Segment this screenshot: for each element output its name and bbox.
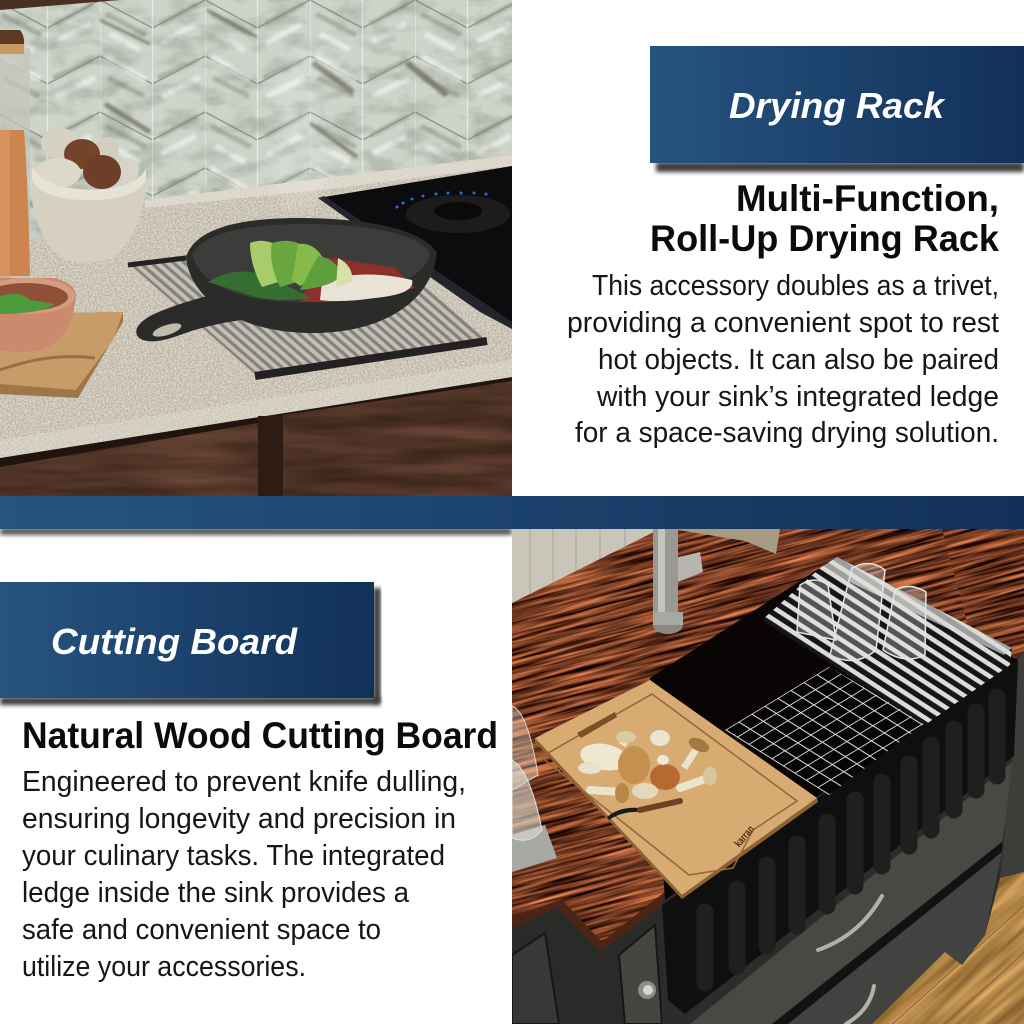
glass jar with orange contents	[0, 30, 30, 280]
body text: drying rack description	[567, 270, 999, 449]
photo: sink with cutting board and rack	[512, 529, 1024, 1024]
brand mark: karran	[732, 823, 757, 850]
body text: drying rack description: This accessory doubles as a trivet,	[592, 270, 999, 302]
roll-up drying rack	[128, 255, 488, 380]
lower left cabinet	[512, 892, 665, 1024]
heading banner: cutting board: Cutting Board	[51, 621, 298, 662]
lower drawer cabinet	[662, 652, 1024, 1024]
body text: cutting board description: Engineered to prevent knife dulling,	[22, 766, 466, 798]
body text: cutting board description: ledge inside the sink provides a	[22, 877, 410, 909]
photo: skillet on roll-up drying rack	[0, 0, 512, 496]
drinking glasses on rack	[797, 563, 926, 660]
tiled wall	[512, 529, 660, 603]
heading banner: drying rack	[650, 46, 1024, 172]
bamboo cutting board	[535, 680, 818, 899]
cooktop blue indicator lights	[396, 192, 488, 208]
body text: drying rack description: with your sink’s integrated ledge	[596, 381, 999, 413]
cabinet knob	[638, 981, 656, 999]
dark wood cabinet drawers	[0, 377, 512, 496]
upper shelf edge	[0, 0, 120, 10]
heading banner: cutting board	[0, 582, 381, 705]
hardwood floor	[872, 872, 1024, 1024]
heading banner: drying rack: Drying Rack	[729, 85, 946, 126]
subheading: natural wood cutting board: Natural Wood Cutting Board	[22, 715, 498, 756]
subheading: multi-function drying rack: Roll-Up Drying Rack	[650, 218, 999, 259]
copper bowl with greens	[0, 278, 76, 352]
sink bottom grid	[725, 667, 925, 795]
board hand grip	[577, 712, 617, 738]
sink fluted apron	[662, 660, 1018, 1014]
blue divider band	[0, 496, 1024, 535]
body text: cutting board description: utilize your accessories.	[22, 951, 306, 983]
body text: cutting board description: your culinary tasks. The integrated	[22, 840, 445, 872]
roll-up rack over sink	[762, 557, 1012, 725]
cooktop burner ring	[406, 195, 510, 233]
subheading: multi-function drying rack: Multi-Function,	[736, 178, 999, 219]
granite countertop	[0, 150, 512, 460]
induction cooktop	[318, 166, 512, 329]
paring knife	[607, 801, 680, 820]
body text: cutting board description: safe and convenient space to	[22, 914, 381, 946]
black sink basin	[650, 568, 1018, 900]
faucet	[653, 529, 780, 634]
glasses and folded napkin	[512, 706, 557, 872]
butcher block wood counter	[512, 529, 1024, 950]
board juice groove	[541, 694, 797, 875]
body text: cutting board description: ensuring longevity and precision in	[22, 803, 456, 835]
skillet food: greens, avocado, egg and peppers	[208, 241, 415, 302]
body text: drying rack description: hot objects. It can also be paired	[598, 344, 999, 376]
chevron marble backsplash	[0, 0, 512, 260]
eggs in speckled bowl	[32, 128, 146, 263]
rack silicone rails	[128, 258, 487, 376]
skillet handle	[136, 296, 241, 342]
steam wisps	[276, 54, 324, 206]
cast iron skillet	[136, 218, 437, 341]
mushrooms	[578, 730, 717, 803]
subheading: multi-function drying rack	[650, 178, 999, 259]
body text: drying rack description: for a space-saving drying solution.	[575, 417, 999, 449]
body text: drying rack description: providing a convenient spot to rest	[567, 307, 999, 339]
body text: cutting board description	[22, 766, 466, 983]
drawer handles	[818, 896, 882, 1024]
wooden serving board	[0, 312, 123, 398]
right side cabinet	[1000, 652, 1024, 878]
